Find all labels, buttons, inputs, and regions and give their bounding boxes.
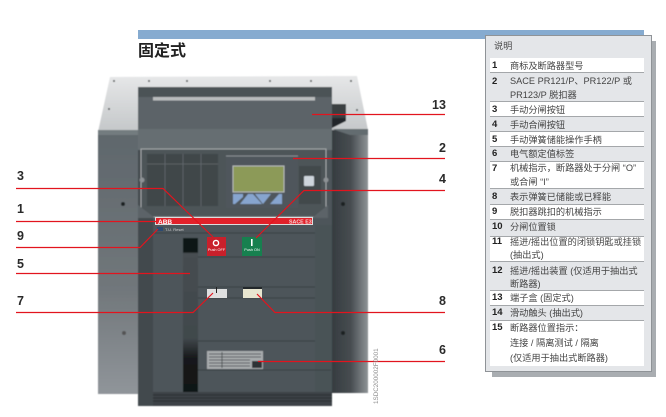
item 10 <box>490 220 644 237</box>
item 1 <box>490 58 644 73</box>
label 2: 2 <box>439 141 446 155</box>
item 3: 手动分闸按钮 <box>510 105 565 115</box>
item 13 <box>490 291 644 306</box>
open closed indicator <box>207 287 227 298</box>
item 7: 或合闸 “I” <box>510 176 549 186</box>
title: 固定式 <box>138 43 186 60</box>
item 6: 6 <box>492 148 497 159</box>
item 15: 15 <box>492 322 503 333</box>
item 8: 表示弹簧已储能或已释能 <box>510 192 611 202</box>
header bar <box>138 30 644 39</box>
item 11: 11 <box>492 236 502 247</box>
item 11: 摇进/摇出位置的闭锁钥匙或挂锁 <box>510 237 641 247</box>
red off button: Push OFF <box>208 248 226 252</box>
red off button <box>207 237 226 256</box>
leader 5 <box>16 272 190 274</box>
leader 4 <box>256 190 445 238</box>
item 1: 1 <box>492 60 497 71</box>
item 6: 电气额定值标签 <box>510 149 574 159</box>
item 3: 3 <box>492 104 497 115</box>
item 7: 7 <box>492 163 497 174</box>
item 4: 4 <box>492 119 497 130</box>
lcd screen <box>233 166 284 192</box>
item 9: 9 <box>492 206 497 217</box>
legend shadow <box>492 41 656 377</box>
red brand band: ABB <box>158 219 172 226</box>
item 9: 脱扣器跳扣的机械指示 <box>510 207 602 217</box>
spring charged indicator <box>243 287 262 298</box>
label 9: 9 <box>17 229 24 243</box>
legend heading: 说明 <box>494 41 512 51</box>
front cover <box>138 129 332 406</box>
leader 9 <box>16 229 158 248</box>
item 10: 10 <box>492 221 503 232</box>
item 7: 机械指示，断路器处于分闸 “O” <box>510 163 636 173</box>
label 3: 3 <box>17 169 24 183</box>
trip reset label: T.U. Reset <box>165 227 185 232</box>
item 6 <box>490 147 644 162</box>
item 12 <box>490 262 644 291</box>
item 4 <box>490 117 644 132</box>
green on button <box>242 237 262 256</box>
breaker body <box>98 76 368 406</box>
leader 2 <box>293 158 445 160</box>
item 1: 商标及断路器型号 <box>510 61 584 71</box>
leader 1 <box>16 220 157 222</box>
right side panel <box>330 130 368 393</box>
right switch <box>299 166 321 204</box>
label 4: 4 <box>439 172 446 186</box>
item 15: 连接 / 隔离测试 / 隔离 <box>510 338 599 348</box>
red brand band <box>155 217 313 226</box>
label 8: 8 <box>439 294 446 308</box>
item 11: (抽出式) <box>510 250 544 260</box>
terminal box <box>138 87 346 129</box>
item 11 <box>490 237 644 262</box>
item 2: PR123/P 脱扣器 <box>510 90 577 100</box>
label 5: 5 <box>17 257 24 271</box>
leader 6 <box>258 360 445 362</box>
item 8 <box>490 189 644 205</box>
item 10: 分闸位置锁 <box>510 222 556 232</box>
item 5 <box>490 132 644 147</box>
leader 8 <box>257 294 445 312</box>
label 7: 7 <box>17 294 24 308</box>
item 4: 手动合闸按钮 <box>510 120 565 130</box>
item 7 <box>490 162 644 189</box>
keypad buttons <box>233 194 282 204</box>
item 14 <box>490 306 644 321</box>
handle, buttons and plates <box>153 233 331 370</box>
item 14: 14 <box>492 307 503 318</box>
red brand band: SACE E3 <box>289 220 312 226</box>
item 12: 断路器) <box>510 278 541 288</box>
trip unit panel <box>138 149 328 218</box>
item 15 <box>490 321 644 366</box>
dark slots <box>147 154 218 206</box>
item 5: 5 <box>492 134 497 145</box>
leader 3 <box>16 188 213 237</box>
item 13: 13 <box>492 292 503 303</box>
item 2: 2 <box>492 76 497 87</box>
item 12: 12 <box>492 265 503 276</box>
photo code: 1SDC200002F0001 <box>373 348 380 404</box>
trip unit <box>226 156 298 208</box>
legend background <box>485 35 652 372</box>
green on button: Push ON <box>244 248 260 252</box>
trip reset label <box>157 227 185 232</box>
item 2 <box>490 73 644 102</box>
item 15: 断路器位置指示： <box>510 323 584 333</box>
item 8: 8 <box>492 191 497 202</box>
label 13: 13 <box>432 98 446 112</box>
item 13: 端子盒 (固定式) <box>510 293 574 303</box>
label 6: 6 <box>439 343 446 357</box>
left side panel <box>98 131 140 394</box>
item 15: (仅适用于抽出式断路器) <box>510 353 608 363</box>
item 2: SACE PR121/P、PR122/P 或 <box>510 76 632 86</box>
item 14: 滑动触头 (抽出式) <box>510 308 583 318</box>
top plate <box>98 76 368 132</box>
leader lines <box>16 114 445 362</box>
leader 7 <box>16 293 213 312</box>
item 12: 摇进/摇出装置 (仅适用于抽出式 <box>510 266 638 276</box>
item 3 <box>490 102 644 117</box>
item 9 <box>490 205 644 220</box>
item 5: 手动弹簧储能操作手柄 <box>510 135 602 145</box>
leader 13 <box>312 114 445 116</box>
label 1: 1 <box>17 202 24 216</box>
